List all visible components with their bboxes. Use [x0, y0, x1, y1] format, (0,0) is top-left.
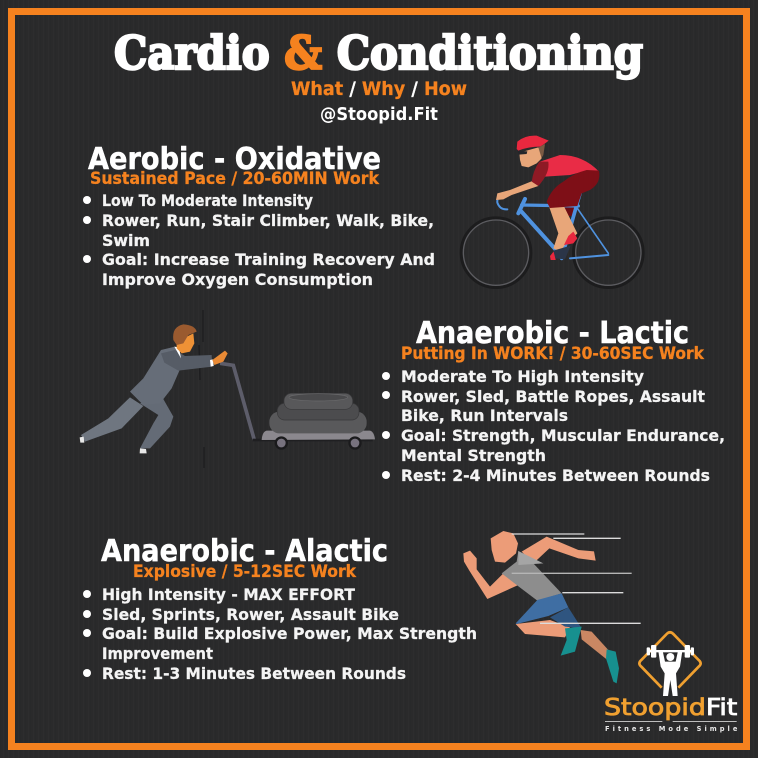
icon: man pushing sled: [80, 324, 375, 453]
panel: aerobic oxidative: [83, 142, 435, 289]
subheading: alactic: Explosive / 5-12SEC Work: [133, 562, 357, 581]
bullet list: alactic: Rest: 1-3 Minutes Between Rounds: [102, 664, 406, 683]
heading: alactic: Anaerobic - Alactic: [101, 534, 388, 569]
header: [114, 26, 643, 125]
icon: weightlifter in diamond: [639, 632, 701, 696]
bullet list: aerobic: Improve Oxygen Consumption: [102, 270, 373, 289]
bullet list: alactic: Goal: Build Explosive Power, Max Strength: [102, 624, 477, 643]
bullet list: lactic: Rower, Sled, Battle Ropes, Assault: [401, 387, 705, 406]
icon: sprinter: [463, 531, 641, 683]
bullet list: alactic: [83, 585, 477, 683]
subheading: aerobic: Sustained Pace / 20-60MIN Work: [90, 169, 380, 188]
subtitle: what why how: What / Why / How: [291, 78, 467, 100]
icon: cyclist: [461, 136, 643, 287]
bullet list: aerobic: Low To Moderate Intensity: [102, 191, 314, 210]
logo: StoopidFit: [604, 632, 738, 733]
bullet list: alactic: High Intensity - MAX EFFORT: [102, 585, 355, 604]
heading: lactic: Anaerobic - Lactic: [416, 316, 689, 351]
panel: anaerobic lactic: [382, 316, 725, 485]
bullet list: lactic: Bike, Run Intervals: [401, 406, 568, 425]
wordmark: StoopidFit: [604, 693, 737, 721]
bullet list: lactic: Moderate To High Intensity: [401, 367, 645, 386]
handle: @Stoopid.Fit: [320, 105, 438, 125]
bullet list: lactic: Mental Strength: [401, 446, 546, 465]
title: Cardio & Conditioning: [114, 26, 643, 80]
bullet list: alactic: Sled, Sprints, Rower, Assault Bike: [102, 605, 399, 624]
tagline: Fitness Mode Simple: [605, 725, 738, 733]
heading: aerobic: Aerobic - Oxidative: [88, 142, 381, 177]
bullet list: aerobic: Goal: Increase Training Recovery And: [102, 250, 435, 269]
bullet list: lactic: Rest: 2-4 Minutes Between Rounds: [401, 466, 710, 485]
panel: anaerobic alactic: [83, 534, 477, 683]
bullet list: aerobic: Rower, Run, Stair Climber, Walk, Bike,: [102, 211, 434, 230]
subheading: lactic: Putting In WORK! / 30-60SEC Work: [401, 344, 705, 363]
bullet list: alactic: Improvement: [102, 644, 213, 663]
bullet list: aerobic: [83, 191, 435, 289]
bullet list: aerobic: Swim: [102, 231, 150, 250]
bullet list: lactic: [382, 367, 725, 485]
bullet list: lactic: Goal: Strength, Muscular Endurance,: [401, 426, 725, 445]
